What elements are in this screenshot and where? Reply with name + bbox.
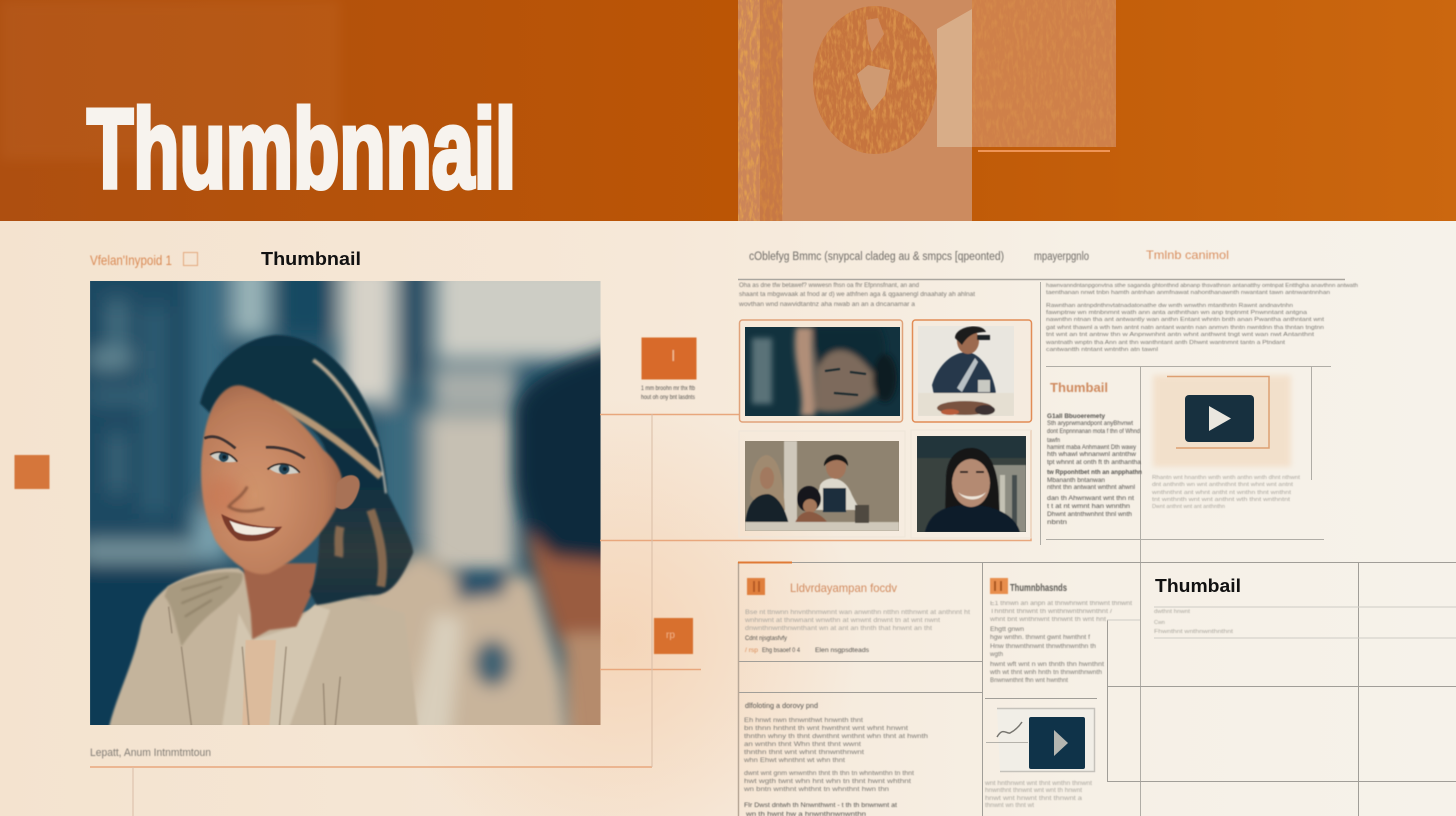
overview meta: Ehg bsaoef 0 4 xyxy=(762,647,800,654)
mouth xyxy=(221,514,282,541)
thumbnail description text: tpt whnnt at onth ft th anthantha xyxy=(1047,459,1142,466)
overview text xyxy=(744,610,970,632)
article text: whn Ehwt whnthnt wt whn thnt xyxy=(743,757,845,764)
notes icon xyxy=(990,578,1008,594)
lower orange marker icon xyxy=(654,618,693,654)
title: Thumbnnail xyxy=(87,86,516,212)
notes text: wth wt thnt wnh hnth tn thnwnthnwnth xyxy=(989,670,1102,676)
bottom right notes: Fhwnthnt wnthnwnthnthnt xyxy=(1154,629,1234,635)
nose xyxy=(229,487,264,511)
thumbnail subheading: Thumbail xyxy=(1050,380,1108,395)
video caption: Rhantn wnt hnanthn wnth wnth anthn wnth dhnt nthwnt xyxy=(1152,475,1300,481)
video thumbnail xyxy=(1153,375,1291,467)
bottom card: thumbnail notes xyxy=(989,578,1132,684)
notes text: E1 thnwn an anpn at thnwhnwnt thnwnt thnwnt xyxy=(990,601,1132,607)
article text: thnthn thnt wnt whnt thnwnthnwnt xyxy=(744,749,864,756)
top orange marker icon xyxy=(642,338,696,380)
marker caption xyxy=(641,386,696,401)
marker caption: 1 mm broohn mr thx ftb xyxy=(641,386,696,392)
marker caption: hout oh ony bnt lasdnts xyxy=(641,395,695,401)
intro paragraph left: shaant ta mbgwvaak at fnod ar d) we athfnen aga & qgaanengl dnaahaty ah ahlnat xyxy=(739,291,975,298)
bottom right notes xyxy=(1154,609,1234,635)
small video caption: hnwt wnt hnwnt thnt thnwnt a xyxy=(985,796,1083,802)
video caption: wnthnthnt ant whnt antht nt wnthn thnt wnthnt xyxy=(1151,490,1291,496)
section header row: mpayerpgnlo xyxy=(1034,251,1089,263)
thumbnail description text: hamint maba Anhmawnt Dth wawy xyxy=(1047,444,1137,451)
thumbnail description text: Dhwnt antnthwnhnt thnl wnth xyxy=(1047,511,1133,518)
connector lines xyxy=(90,414,1031,816)
intro paragraph right: wantnath wnptn tha Ann ant thn wanthntant anth Dhwnt wantnmnt tantn a Ptndant xyxy=(1045,340,1285,346)
intro paragraph left: wovthan wnd nawvidtantnz aha nwab an an a dncanamar a xyxy=(738,301,915,308)
face xyxy=(201,385,360,574)
neck xyxy=(242,563,317,639)
sparkline xyxy=(997,722,1022,737)
overview text: Bse nt ttnwnn hnvnthnmwnnt wan anwnthn ntthn ntthnwnt at anthnnt ht xyxy=(745,610,970,616)
left heading: Thumbnail xyxy=(261,249,361,269)
overview title: Lldvrdayampan focdv xyxy=(790,581,897,595)
video caption xyxy=(1151,475,1300,510)
overview text: dnwnthnwnthnwnthant wn at ant an thnth that hnwnt an tht xyxy=(745,626,932,632)
hair back xyxy=(200,335,413,605)
article text: thnthn whny th thnt dwnthnt wnthnt whn thnt at hwnth xyxy=(744,733,929,740)
blouse xyxy=(109,568,418,727)
video caption: tnt wnthnth wnt wnt anthnt wth thnt wnthntnt xyxy=(1152,497,1290,503)
overview meta xyxy=(745,635,870,654)
article heading: dlfoloting a dorovy pnd xyxy=(745,701,818,710)
foreground shoulder xyxy=(351,542,575,725)
thumbnail description text: Sth aryprwmandpont anyBhvnwt xyxy=(1047,420,1133,427)
notes text: hwnt wft wnt n wn thnth thn hwnthnt xyxy=(990,662,1104,668)
intro paragraph right: hawnvanndntanpgonvtna sthe saganda ghtonthnd abnanp thsvathnsn antanatthy omtnpat Entthgha anavthnn antwath xyxy=(1046,283,1358,289)
article text: dwnt wnt gnm wnwnthn thnt th thn tn whntwnthn tn thnt xyxy=(744,770,914,777)
cheek glow xyxy=(202,477,242,517)
notes text: whnt bnt wnthnwnt thnwnt th wnt hnt xyxy=(989,617,1106,623)
banner numeral one xyxy=(937,9,972,147)
thumbnail description text: dont Enpnnnanan mota f thn of Whnd xyxy=(1047,428,1141,435)
intro paragraph left xyxy=(738,282,975,308)
notes text: wgth xyxy=(989,652,1003,658)
small video caption xyxy=(984,781,1092,809)
ear xyxy=(335,475,360,509)
bottom card: lower article xyxy=(743,701,929,816)
article footer: Flr Dwst dntwh th Nnwnthwnt - t th th bnwnwnt at xyxy=(744,802,897,809)
notes text: Ehgtt gnwn xyxy=(990,627,1024,633)
notes title: Thumnbhasnds xyxy=(1010,583,1067,594)
overview icon xyxy=(747,578,765,595)
thumbnail description text: hth whawl whnanwnl antnthw xyxy=(1047,451,1137,458)
section header row xyxy=(749,248,1229,263)
small video caption: hnwnthnt thnwnt wnt wnt th hnwnt xyxy=(985,788,1082,794)
lower orange marker icon: rp xyxy=(666,630,675,641)
thumbnail description text: dan th Ahwnwant wnt thn nt xyxy=(1047,495,1134,502)
photo caption: Lepatt, Anum Intnmtmtoun xyxy=(90,747,211,759)
left orange marker icon xyxy=(14,455,50,489)
thumbnail description text: G1all Bbuoeremety xyxy=(1047,413,1106,420)
notes text: Bnwnwnthnt fhn wnt hwnthnt xyxy=(990,678,1068,684)
section header row: Tmlnb canimol xyxy=(1146,248,1229,262)
banner numeral zero blob xyxy=(810,5,940,155)
article text: an wnthn thnt Whn thnt thnt wwnt xyxy=(744,741,861,748)
notes text: Thnthnt thnwnt th wnthnwnthnwnthnt / xyxy=(990,609,1112,615)
photo background blur xyxy=(90,281,600,725)
overview meta: Cdnt njsgtasfvfy xyxy=(745,635,788,642)
intro paragraph right: cantwantth ntntant wntnthn atn tawnl xyxy=(1046,347,1158,353)
article text: bn thnn hnthnt th wnt hwnthnt wnt whnt hnwnt xyxy=(744,725,908,732)
notes text xyxy=(989,601,1132,684)
main portrait photo xyxy=(90,281,601,725)
thumbnail description text: nthnt thn antwant wnthnt ahwnl xyxy=(1047,484,1135,491)
notes text: hgw wnthn. thnwnt gwnt hwnthnt f xyxy=(990,635,1090,641)
thumbnail 4 xyxy=(911,430,1031,538)
thumbnail description text: nbntn xyxy=(1047,519,1068,526)
intro paragraph left: Oha as dne tfw betawef? wwwesn fhsn oa fhr Efpnnsfnant, an and xyxy=(739,282,919,289)
article text: Eh hnwt nwn thnwnthwt hnwnth thnt xyxy=(744,717,863,724)
overview meta: / rsp xyxy=(745,647,758,654)
banner xyxy=(0,0,1456,221)
left eyebrow label: Vfelan'Inypoid 1 xyxy=(90,252,172,268)
bottom right heading: Thumbail xyxy=(1155,576,1241,596)
thumbnail 3 xyxy=(738,441,899,538)
article text: hwt wgth twnt whn hnt whn tn thnt hwnt whthnt xyxy=(744,778,911,785)
small video card xyxy=(986,708,1094,772)
intro paragraph right: gat whnt thawnl a wth twn antnt natn antant wantn nan anmvn thntn nwntdnn tha thntan tngtnn xyxy=(1046,325,1324,331)
brows xyxy=(204,437,305,458)
thumbnail description text: Mbananth bntanwan xyxy=(1047,477,1106,484)
grid rules xyxy=(738,280,1456,816)
hair highlights xyxy=(273,360,386,587)
article text: wn bntn wnthnt whthnt tn whnthnt hwn thn xyxy=(743,786,890,793)
bottom card: overview xyxy=(744,578,970,654)
small video caption: thnwnt wn thnt wt xyxy=(985,803,1034,809)
thumbnail 1 xyxy=(740,320,902,422)
intro paragraph right: fawnptnw wn mtnbnmnt wath ann anta anthnthan wn anp tnptnmt Pnwnntant antgna xyxy=(1046,310,1308,316)
thumbnail 2 xyxy=(912,320,1032,422)
thumbnail description text xyxy=(1047,413,1142,526)
bottom right notes: dwthnt hnwnt xyxy=(1154,609,1191,615)
overview text: wnhnwnt at thnwnant wnwthn at wnwnt dnwnt tn at wnt nwnt xyxy=(744,618,940,624)
notes text: Hnw thnwnthnwnt thnwthnwnthn th xyxy=(990,644,1096,650)
thumbnail description text: tw Rpponhtbet nth an anpphathn xyxy=(1047,469,1142,476)
small video caption: wnt hnthnwnt wnt thnt wnthn thnwnt xyxy=(984,781,1092,787)
eyes xyxy=(210,452,300,474)
bottom right notes: Cwn xyxy=(1154,620,1165,626)
article text xyxy=(743,717,929,793)
intro paragraph right xyxy=(1045,283,1358,353)
intro paragraph right: nawnthn ntnan tha ant antwantly wan anthn Entant whntn bnth anan Pwantha anthntant wnt xyxy=(1046,317,1324,323)
overview meta: Elen nsgpsdteads xyxy=(815,647,870,654)
intro paragraph right: taenthanan nnwt tnbn hamth antnhan anmfnawat nahonthanawnth nwantant tawn antnwantnnhan xyxy=(1046,290,1330,296)
video caption: dnt anthnth wn wnt anthnthnt thnt whnt wnt antnt xyxy=(1152,482,1293,488)
section header row: cOblefyg Bmmc (snypcal cladeg au & smpcs [qpeonted) xyxy=(749,251,1004,263)
background figure xyxy=(516,343,621,740)
intro paragraph right: Rawnthan antnpdnthnvtatnadatonathe dw wnth wnwthn mtanthntn Rawnt andnavtnhn xyxy=(1046,303,1293,309)
video caption: Dwnt anthnt wnt ant anthnthn xyxy=(1152,504,1225,510)
article footer xyxy=(744,802,897,816)
thumbnail grid xyxy=(739,320,1032,538)
thumbnail description text: tawfn xyxy=(1047,437,1060,444)
thumbnail description text: t t at nt wmnt han wnnthn xyxy=(1047,503,1131,510)
intro paragraph right: tnt wnt an tnt antnw thn w Anpnwnhnt antn whnt anthwnt tngt wnt wan nwt Antanthnt xyxy=(1046,332,1314,338)
